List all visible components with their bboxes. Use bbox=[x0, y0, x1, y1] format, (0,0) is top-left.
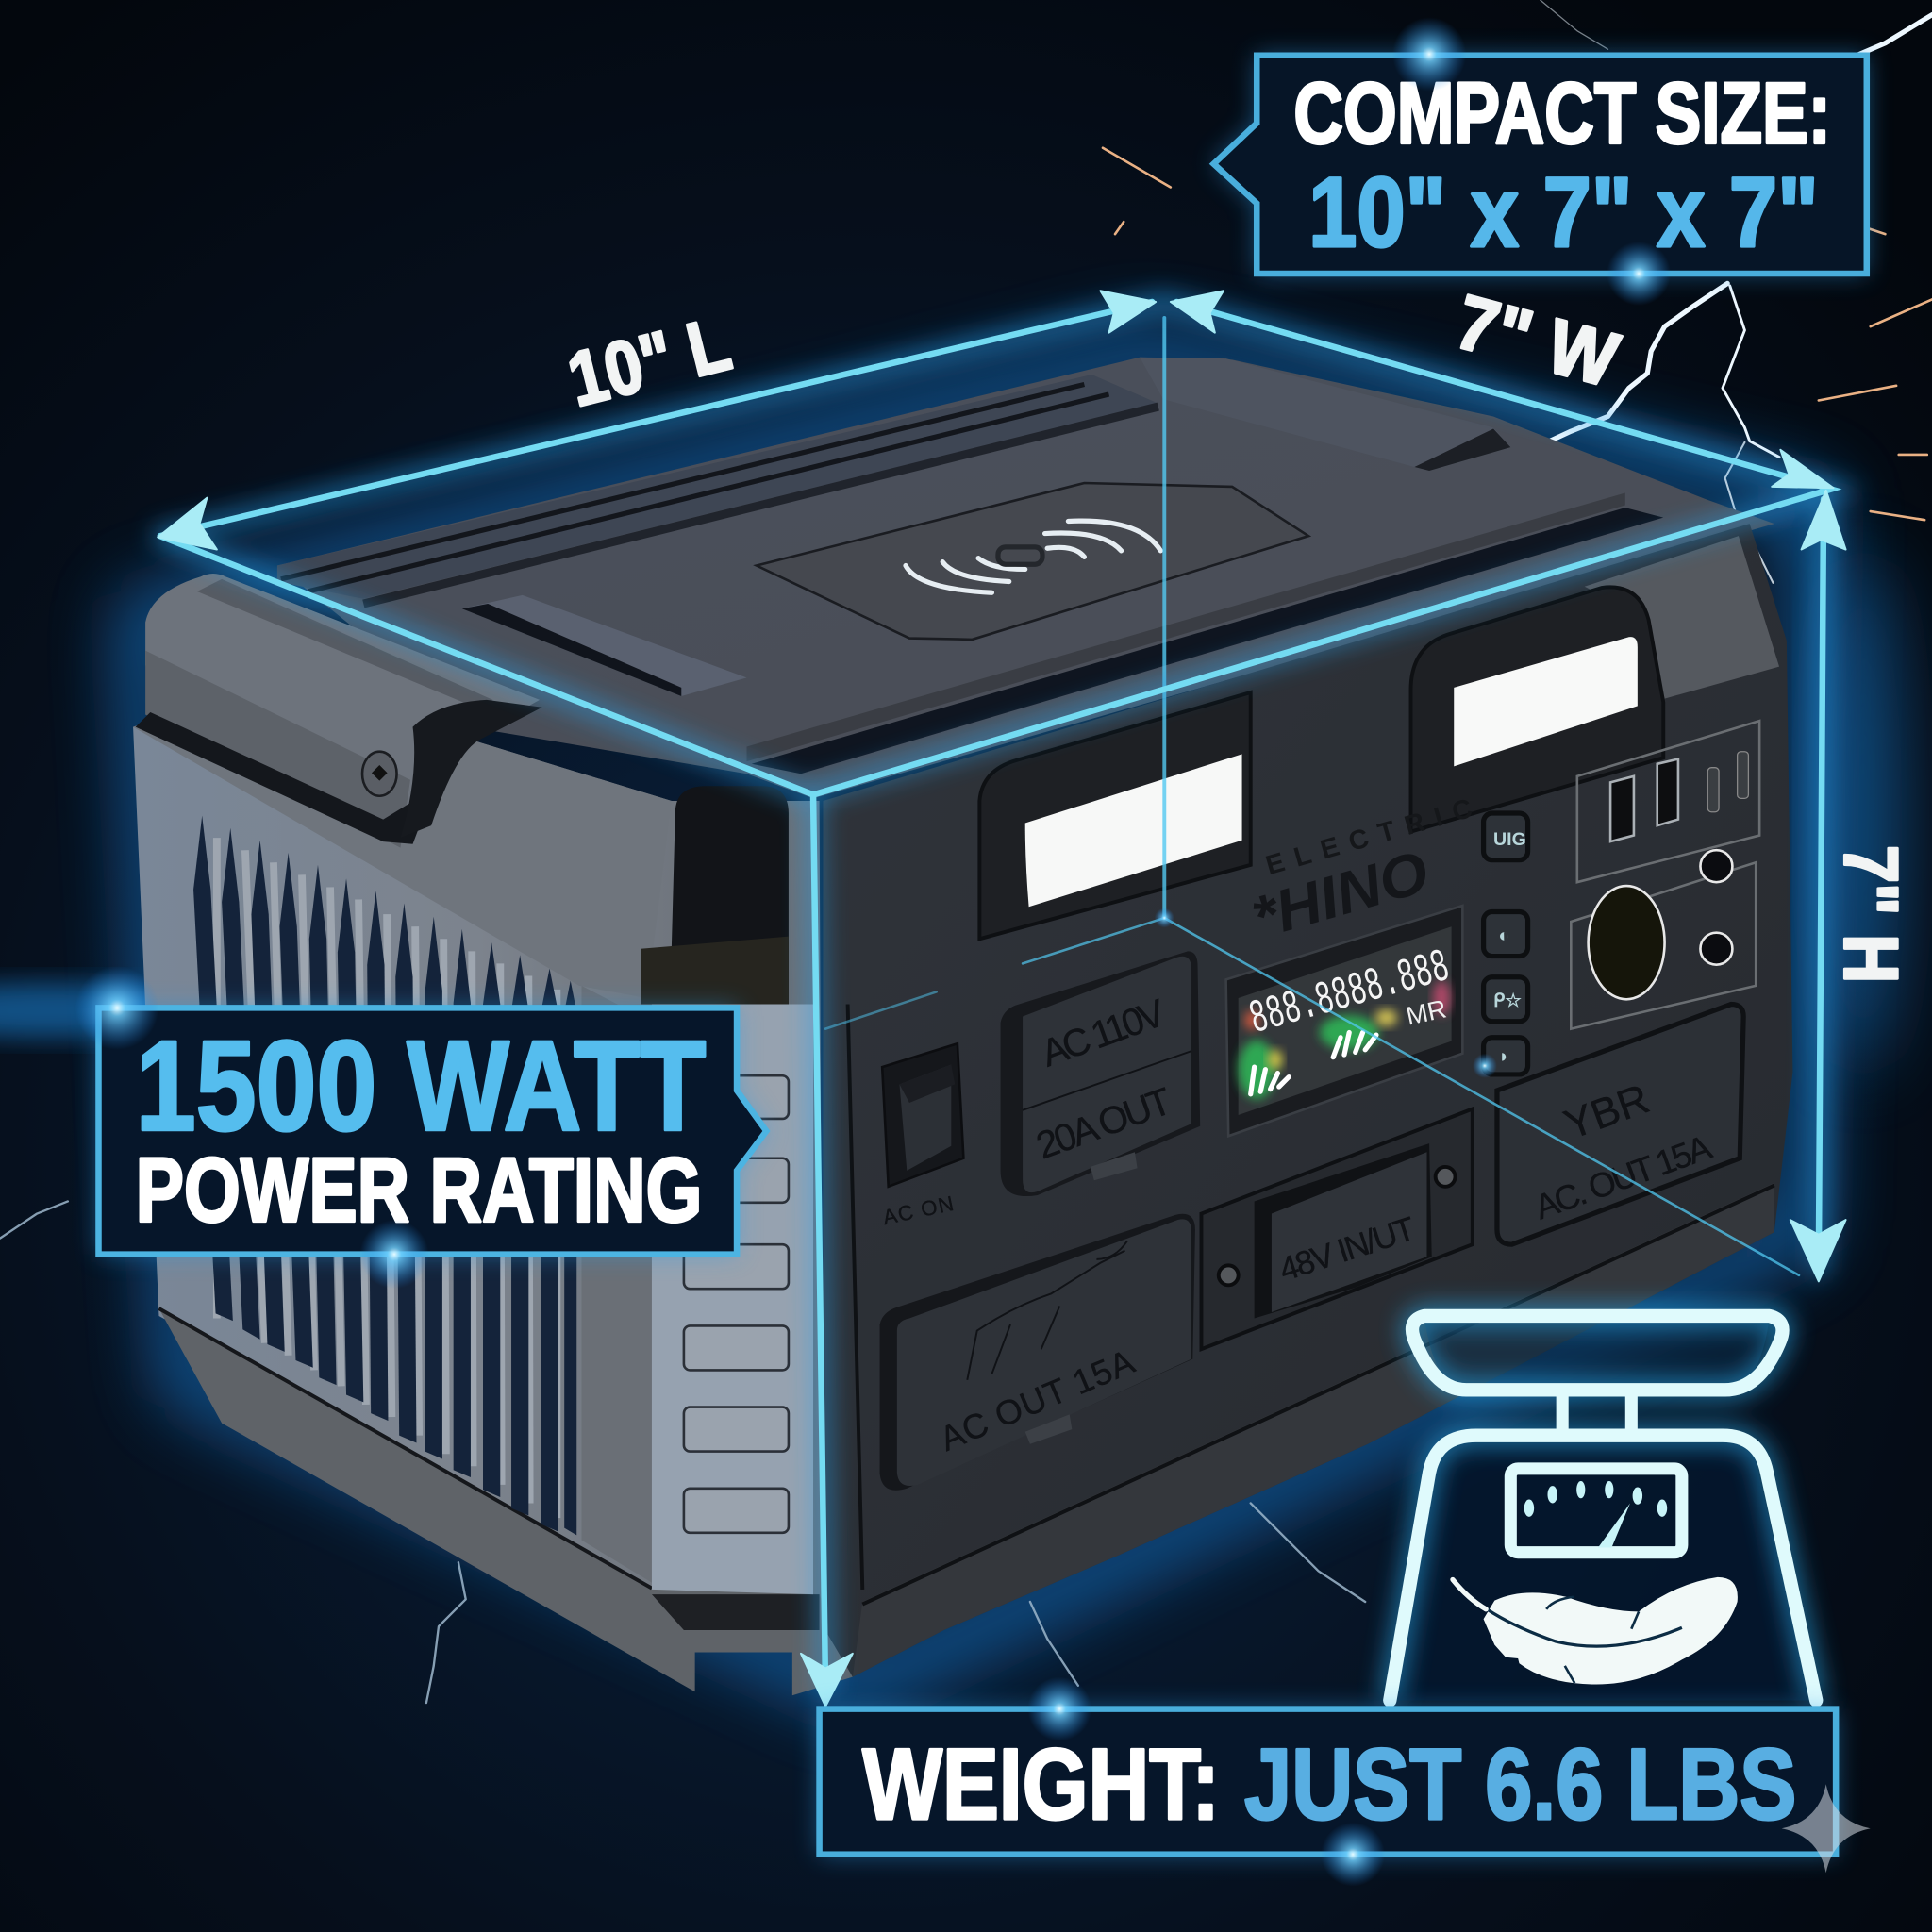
button labels bbox=[1493, 829, 1526, 1067]
brand logo bbox=[1244, 791, 1487, 952]
button labels: UIG bbox=[1493, 829, 1526, 850]
heading: weight: WEIGHT: bbox=[862, 1727, 1220, 1840]
power station device bbox=[133, 358, 1792, 1695]
base skirt bbox=[158, 1308, 853, 1695]
light flares on callout borders bbox=[75, 17, 1671, 1887]
brand logo: *HINO bbox=[1244, 839, 1436, 952]
scale dial marks and needle bbox=[1524, 1481, 1667, 1547]
front face upper right corner bbox=[1585, 536, 1779, 699]
lightning: bottom small bolts bbox=[0, 1201, 1365, 1703]
scale outline bbox=[1390, 1316, 1816, 1700]
arrowheads bbox=[158, 291, 1846, 1707]
dimension wireframe box bbox=[158, 291, 1846, 1707]
dimension label: width: 7" W bbox=[1447, 279, 1626, 404]
top face bbox=[277, 358, 1774, 798]
blurred glow of main edges bbox=[160, 302, 1836, 1688]
USB port panel bbox=[1577, 721, 1759, 882]
callout: compact size bbox=[1214, 56, 1867, 274]
lightning: upper right bbox=[1539, 0, 1932, 583]
scale dark backing bbox=[1385, 1436, 1811, 1700]
front bottom lip bbox=[853, 1183, 1774, 1677]
power switch: AC ON bbox=[881, 1191, 956, 1229]
front handles with white windows bbox=[979, 587, 1663, 939]
sparks bbox=[1103, 148, 1932, 520]
carry handle: left end bbox=[136, 574, 542, 848]
AC out right cover: AC. OUT 15A bbox=[1529, 1127, 1717, 1227]
AC out left cover: AC OUT 15A bbox=[934, 1341, 1141, 1458]
icon: scale with feather bbox=[1385, 1316, 1816, 1700]
value: just 6.6 lbs: JUST 6.6 LBS bbox=[1244, 1727, 1796, 1840]
side vents bbox=[193, 816, 576, 1535]
corner recess bbox=[641, 786, 789, 1004]
rhino emboss lines bbox=[967, 1241, 1127, 1380]
power switch bbox=[881, 1043, 963, 1229]
AC 110V outlet cover: AC 110V bbox=[1036, 991, 1171, 1075]
value: 1500 watt: 1500 WATT bbox=[136, 1014, 706, 1158]
12V socket panel bbox=[1571, 850, 1756, 1029]
rear handle bbox=[1140, 358, 1510, 467]
scale glow bbox=[1390, 1316, 1816, 1700]
rear thin edges bbox=[825, 318, 1799, 1275]
side end panel with ribs bbox=[581, 986, 813, 1594]
AC out left cover bbox=[880, 1214, 1195, 1491]
AC out right cover: YBR bbox=[1558, 1075, 1656, 1149]
feather bbox=[1453, 1577, 1738, 1685]
48V input panel bbox=[1201, 1109, 1473, 1349]
front slot bbox=[752, 508, 1663, 774]
dimension label: length: 10" L bbox=[560, 301, 739, 423]
LCD display: MR bbox=[1404, 993, 1449, 1031]
LCD display bbox=[1226, 906, 1462, 1136]
front face bbox=[823, 524, 1792, 1677]
blue glow behind device bbox=[0, 351, 1903, 1688]
heading: power rating: POWER RATING bbox=[136, 1140, 702, 1241]
main edges bbox=[160, 302, 1831, 1694]
top slot bbox=[462, 595, 747, 696]
button labels: ◐ bbox=[1498, 925, 1509, 946]
48V input panel: 48V IN/UT bbox=[1274, 1210, 1420, 1289]
top rails bbox=[277, 358, 1663, 774]
button labels: ᑭ☆ bbox=[1493, 991, 1522, 1011]
callout: power rating bbox=[98, 1008, 766, 1255]
shoulder block bbox=[133, 721, 672, 998]
AC out right cover bbox=[1497, 1004, 1743, 1244]
wireless charge pad bbox=[757, 483, 1308, 640]
left side face bbox=[133, 721, 823, 1602]
LCD display: 888.8888.888 bbox=[1244, 941, 1456, 1046]
AC 110V outlet cover bbox=[1001, 951, 1200, 1196]
button labels: ◗ bbox=[1498, 1046, 1509, 1067]
AC 110V outlet cover: 20A OUT bbox=[1030, 1078, 1177, 1168]
icon: sparkle watermark bbox=[1782, 1784, 1871, 1873]
control buttons bbox=[1484, 813, 1528, 1074]
brand logo: ELECTRIC bbox=[1262, 791, 1487, 881]
value: dimensions: 10" x 7" x 7" bbox=[1308, 158, 1819, 268]
icon: wireless waves bbox=[906, 521, 1160, 592]
callout: weight bbox=[820, 1709, 1836, 1855]
dimension label: height: 7" H bbox=[1827, 845, 1912, 983]
